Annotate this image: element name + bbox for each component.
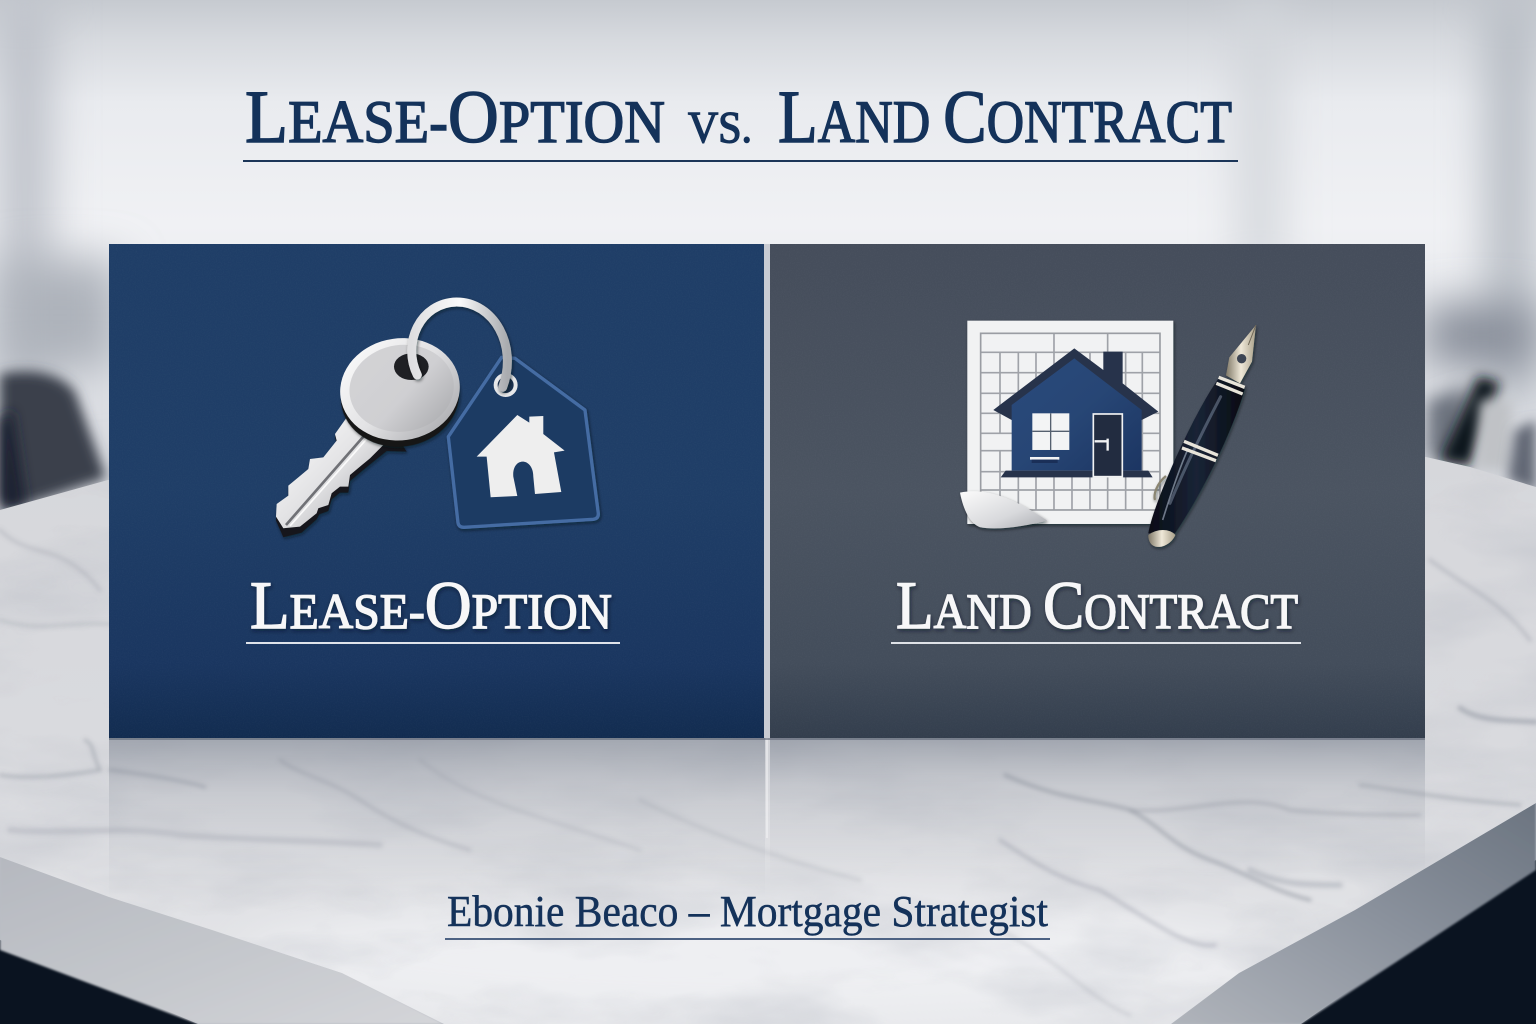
fountain pen bbox=[1148, 325, 1256, 547]
label: lease-option: LEASE-OPTION bbox=[250, 567, 612, 643]
underline: lease-option bbox=[246, 642, 620, 644]
background: blurred chairs bbox=[0, 371, 1536, 512]
panel divider bbox=[764, 244, 770, 738]
marble table top bbox=[0, 450, 1536, 1024]
title bbox=[245, 76, 1232, 159]
panel: land contract bbox=[770, 244, 1425, 738]
title: LEASE-OPTION bbox=[245, 76, 665, 159]
footer byline: Ebonie Beaco – Mortgage Strategist bbox=[447, 887, 1048, 936]
label: land contract: LAND CONTRACT bbox=[896, 567, 1298, 643]
icon: key with house tag bbox=[276, 302, 598, 537]
icon: house plan with fountain pen bbox=[960, 321, 1256, 547]
table edge: right bbox=[1171, 800, 1536, 1024]
title underline bbox=[243, 160, 1238, 162]
panel: lease-option bbox=[109, 244, 764, 738]
key blade bbox=[276, 417, 407, 537]
footer underline bbox=[445, 938, 1050, 940]
underline: land contract bbox=[891, 642, 1301, 644]
key head bbox=[333, 330, 466, 454]
paper curl bbox=[960, 491, 1047, 529]
key ring bbox=[412, 302, 507, 387]
panel shadow base bbox=[109, 736, 1425, 740]
under-table shadow bbox=[0, 860, 1536, 1024]
blueprint sheet bbox=[967, 321, 1173, 524]
table edge: left bbox=[0, 855, 444, 1024]
house tag bbox=[448, 357, 598, 527]
title: LAND CONTRACT bbox=[778, 76, 1232, 159]
house drawing bbox=[993, 348, 1158, 477]
title: VS. bbox=[688, 103, 752, 152]
